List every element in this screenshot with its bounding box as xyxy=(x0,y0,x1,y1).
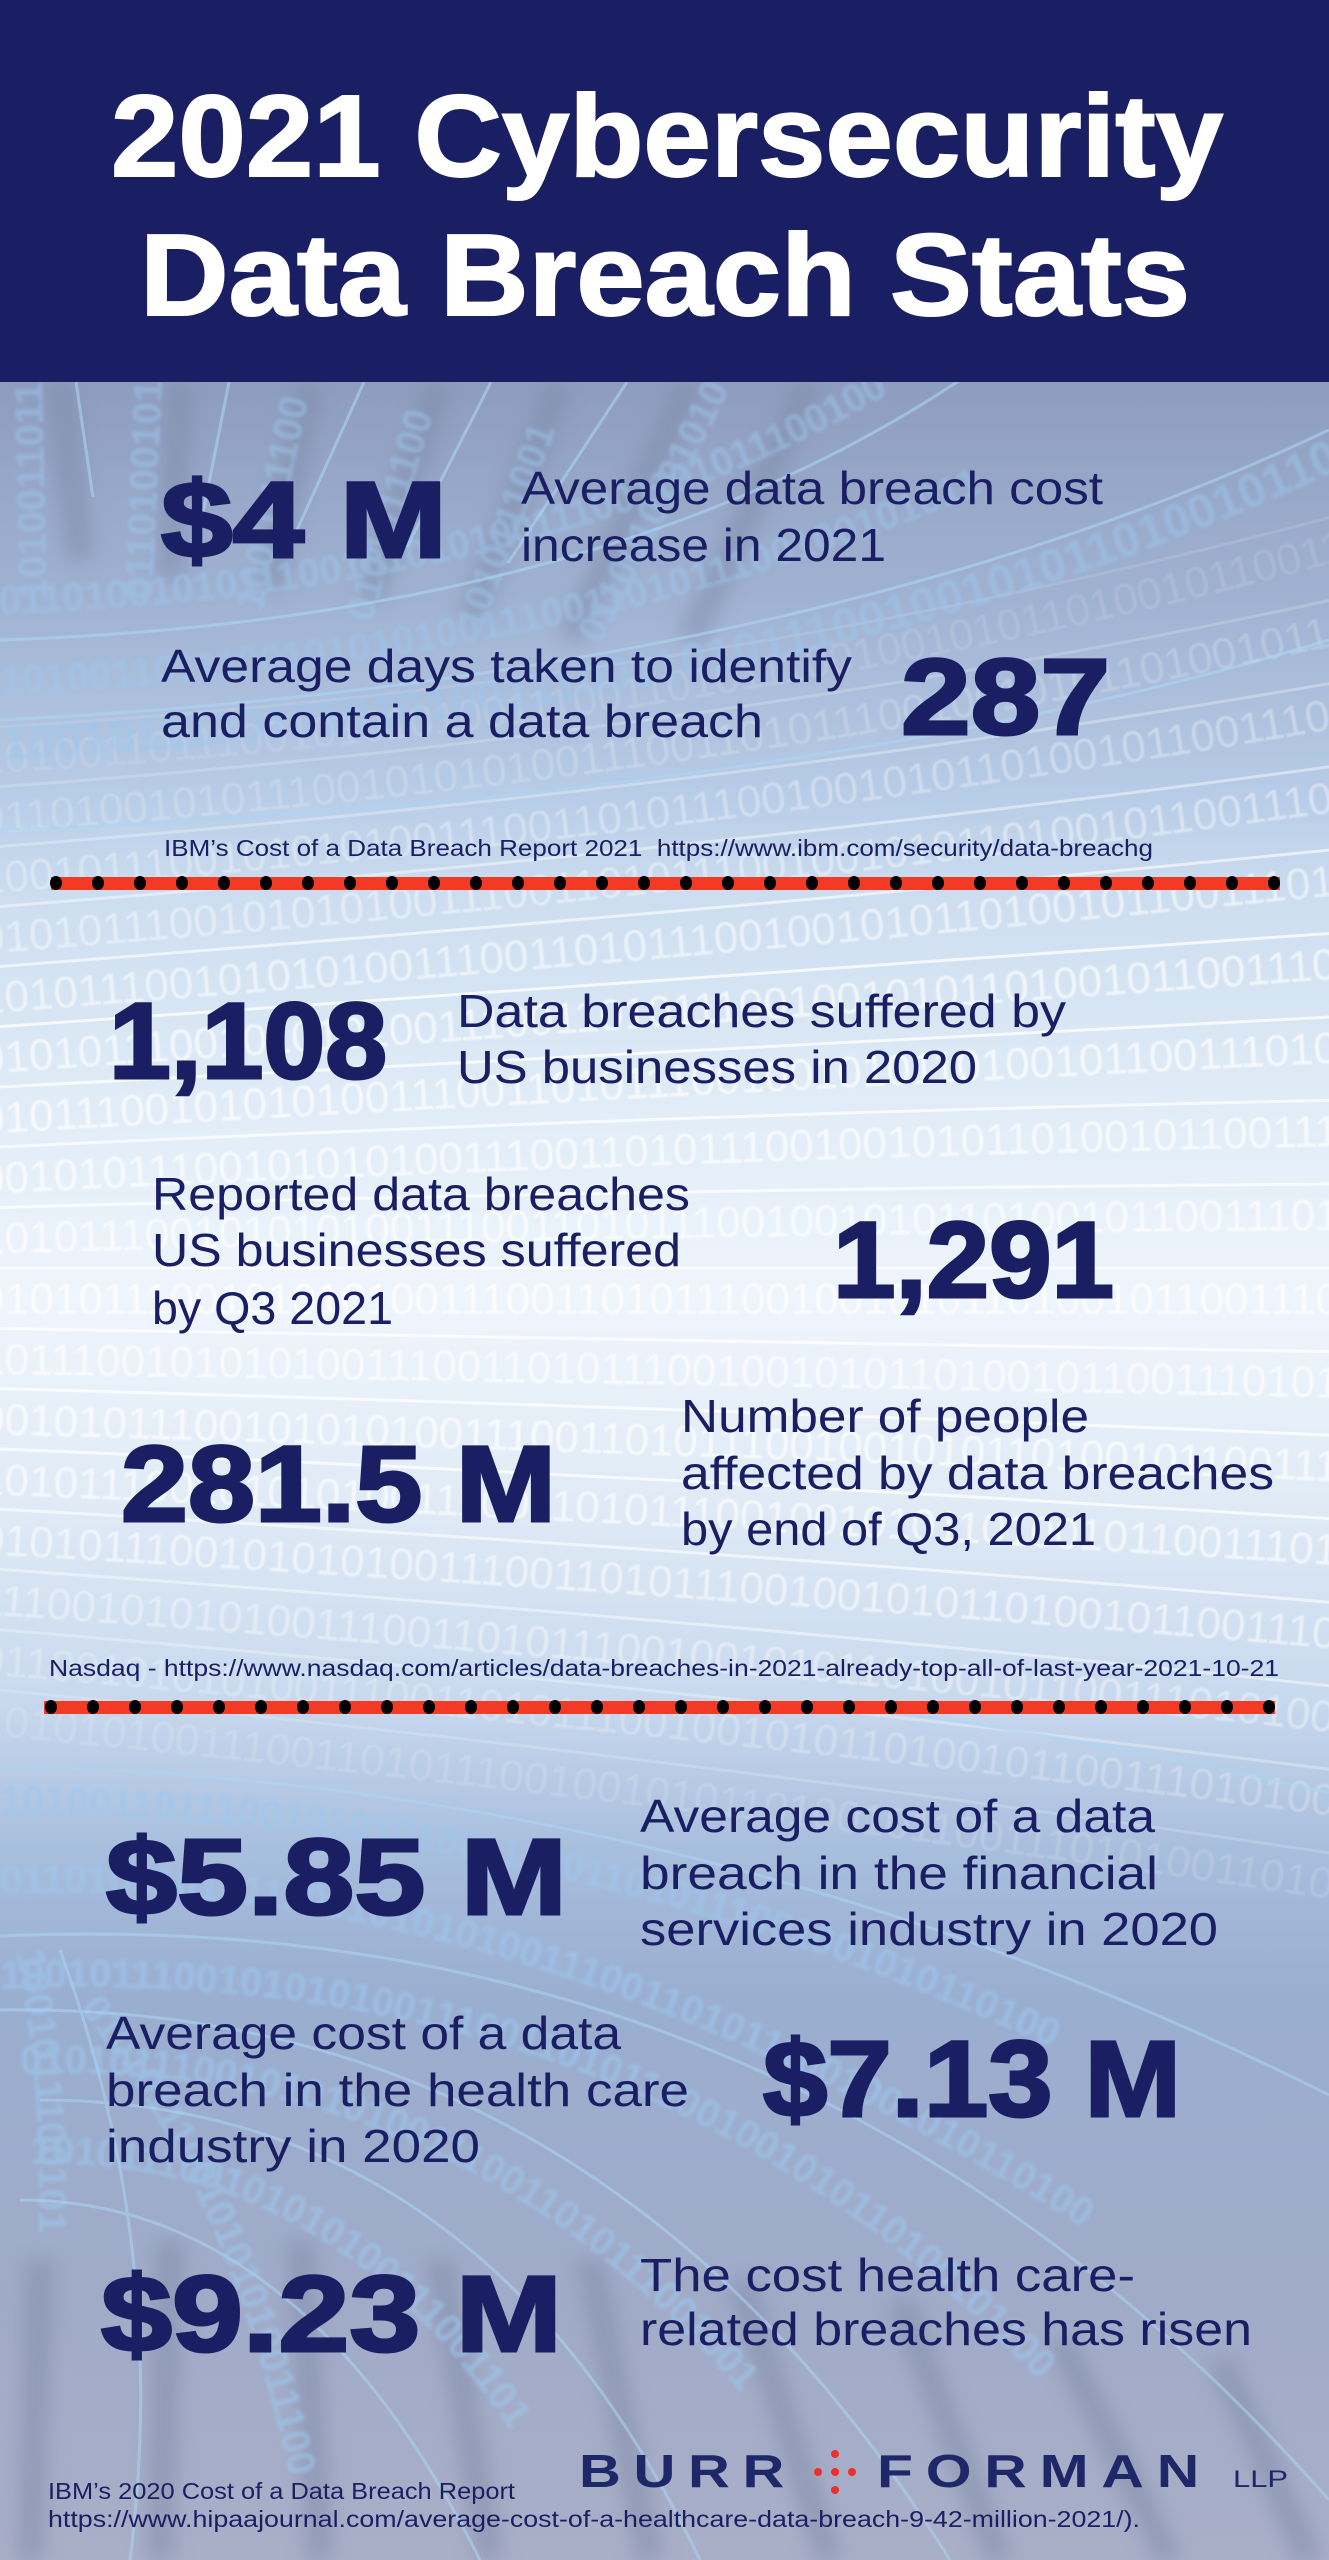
logo: Burr Forman LLP: LLP xyxy=(1233,2466,1288,2493)
header banner xyxy=(0,0,1329,382)
top curves and digits: 1001011100 xyxy=(237,397,308,608)
stat: $5.85 M: $5.85 M xyxy=(106,1816,567,1937)
logo: Burr Forman LLP: BURR xyxy=(579,2445,797,2497)
text: average data breach cost: increase in 2021 xyxy=(521,519,886,571)
stat: 1,108: 1,108 xyxy=(109,980,387,1101)
white row lines xyxy=(0,512,1329,1856)
text: average days: and contain a data breach xyxy=(161,695,763,747)
text: average data breach cost: Average data breach cost xyxy=(521,462,1103,514)
source: IBM 2020 xyxy=(48,2478,1140,2532)
title: 2021 Cybersecurity xyxy=(111,71,1223,201)
bottom curves and digits xyxy=(0,1779,1102,2479)
source: Nasdaq: Nasdaq - https://www.nasdaq.com/articles/data-breaches-in-2021-already-top-all-of-last-year-2021-10-21 xyxy=(49,1655,1279,1681)
text: cost has risen: The cost health care- xyxy=(640,2249,1135,2301)
stat: 281.5 M: 281.5 M xyxy=(121,1423,556,1544)
divider 2 xyxy=(44,1700,1275,1714)
top curves and digits: 1010011011100101010100111001101011100100101011 xyxy=(8,470,982,692)
section 2: Nasdaq stats xyxy=(49,980,1279,1681)
top curves and digits: 0110100101 xyxy=(126,382,162,598)
text: data breaches suffered: US businesses in 2020 xyxy=(457,1041,977,1093)
stat: $9.23 M: $9.23 M xyxy=(101,2253,562,2374)
text: reported data breaches: US businesses suffered xyxy=(152,1224,681,1276)
section 1: IBM 2021 stats xyxy=(161,459,1153,861)
text: number of people xyxy=(681,1390,1274,1555)
bottom curves and digits: 010101110010101010011100 xyxy=(72,1987,324,2479)
text: financial services: services industry in 2020 xyxy=(640,1903,1218,1955)
text: financial services: Average cost of a data xyxy=(640,1790,1155,1842)
text: health care: Average cost of a data xyxy=(106,2007,621,2059)
text: financial services xyxy=(640,1790,1218,1955)
stat: 1,291: 1,291 xyxy=(833,1199,1114,1320)
top curves and digits: 1010111001 xyxy=(459,427,555,630)
text: financial services: breach in the financial xyxy=(640,1847,1158,1899)
divider 1 xyxy=(50,876,1280,890)
text: number of people: by end of Q3, 2021 xyxy=(681,1503,1096,1555)
bottom curves and digits: 01010111001010101001110011010111001001 xyxy=(19,2038,768,2399)
logo: Burr Forman LLP: FORMAN xyxy=(877,2445,1212,2497)
text: reported data breaches xyxy=(152,1168,690,1334)
stat: $4 M: $4 M xyxy=(161,459,447,580)
text: average days xyxy=(161,640,852,747)
text: average days: Average days taken to identify xyxy=(161,640,852,692)
source: IBM 2020: IBM’s 2020 Cost of a Data Breach Report xyxy=(48,2478,516,2504)
bottom curves and digits: 10010111001010101001110011010111001001010110100101100 xyxy=(0,1952,1064,2387)
text: health care: breach in the health care xyxy=(106,2064,689,2116)
source: IBM 2020: https://www.hipaajournal.com/average-cost-of-a-healthcare-data-breach-9-42-million-2021/). xyxy=(48,2506,1140,2532)
text: data breaches suffered xyxy=(457,985,1066,1093)
text: number of people: Number of people xyxy=(681,1390,1089,1442)
top curves and digits: 1010011011 xyxy=(14,382,46,596)
logo: Burr Forman LLP xyxy=(579,2445,1288,2497)
text: cost has risen xyxy=(640,2249,1252,2355)
text: number of people: affected by data breaches xyxy=(681,1447,1274,1499)
bottom curves and digits: 01101001010111001010101001110011010111001001010110100 xyxy=(2,1866,1093,2224)
source: IBM 2021: IBM’s Cost of a Data Breach Report 2021 https://www.ibm.com/security/data-breachg xyxy=(164,835,1153,861)
bottom curves and digits: 10100110111001010101001110011010111001001010110100 xyxy=(4,1786,1059,2045)
text: reported data breaches: by Q3 2021 xyxy=(152,1282,393,1334)
stat: $7.13 M: $7.13 M xyxy=(763,2018,1181,2139)
icon: red dot cross xyxy=(814,2450,856,2494)
text: health care: industry in 2020 xyxy=(106,2120,480,2172)
top curves and digits: 0101011100 xyxy=(348,410,432,618)
stat: 287: 287 xyxy=(901,636,1110,757)
title xyxy=(111,71,1223,340)
text: data breaches suffered: Data breaches suffered by xyxy=(457,985,1066,1037)
text: reported data breaches: Reported data breaches xyxy=(152,1168,690,1220)
bottom curves and digits: 1001011100101 xyxy=(7,1946,74,2234)
bottom curves and digits: 101011100101010100111001101 xyxy=(30,2129,540,2436)
text: health care xyxy=(106,2007,689,2172)
section 3: cost by industry xyxy=(48,1790,1252,2532)
text: cost has risen: related breaches has risen xyxy=(640,2303,1252,2355)
text: average data breach cost xyxy=(521,462,1103,571)
title: Data Breach Stats xyxy=(140,210,1190,340)
top curves and digits: 1001011100101010100111001101011100100101011010010110011 xyxy=(6,442,1329,760)
top curves and digits: 0110100101011100101010100111001101011100100 xyxy=(0,382,884,614)
top curves and digits: 0110010101010 xyxy=(580,382,726,640)
